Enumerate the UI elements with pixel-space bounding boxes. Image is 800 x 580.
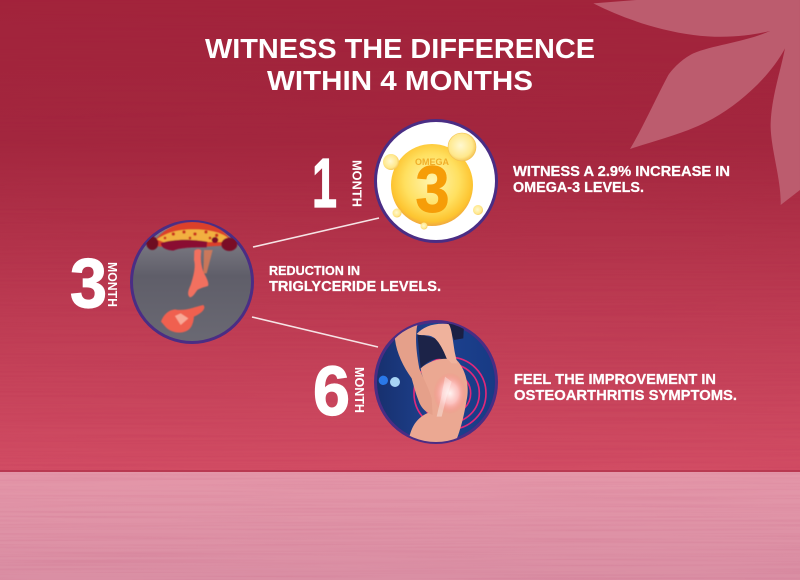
label: month: MONTH	[352, 367, 366, 413]
icon: omega-3 capsule: 3	[416, 152, 450, 226]
title: WITHIN 4 MONTHS	[267, 65, 533, 96]
milestone: 3 month	[70, 222, 441, 342]
description: TRIGLYCERIDE LEVELS.	[269, 279, 441, 295]
description: OMEGA-3 LEVELS.	[513, 180, 644, 196]
decorative flower leaves	[593, 0, 800, 205]
icon: triglycerides in water	[132, 222, 252, 342]
description: WITNESS A 2.9% INCREASE IN	[513, 164, 730, 180]
description	[269, 263, 441, 295]
description: OSTEOARTHRITIS SYMPTOMS.	[514, 388, 737, 404]
label: month: MONTH	[350, 160, 364, 207]
milestone: 1 month	[312, 120, 730, 242]
number 1: 1	[312, 144, 337, 222]
icon: knee joint	[376, 322, 496, 443]
connector arrow: 3 month to 1 month	[253, 218, 379, 247]
milestone: 6 month	[313, 322, 737, 443]
number 3: 3	[70, 244, 107, 322]
icon: omega-3 capsule: OMEGA	[415, 157, 449, 167]
title: WITNESS THE DIFFERENCE	[205, 33, 595, 64]
description: REDUCTION IN	[269, 263, 360, 278]
number 6: 6	[313, 352, 350, 430]
description	[513, 164, 730, 196]
icon: omega-3 capsule	[376, 120, 496, 242]
description	[514, 372, 737, 404]
title	[205, 33, 595, 96]
description: FEEL THE IMPROVEMENT IN	[514, 372, 716, 388]
floor band	[0, 470, 800, 580]
connector arrow: 3 month to 6 month	[252, 317, 378, 347]
label: month: MONTH	[105, 262, 119, 307]
